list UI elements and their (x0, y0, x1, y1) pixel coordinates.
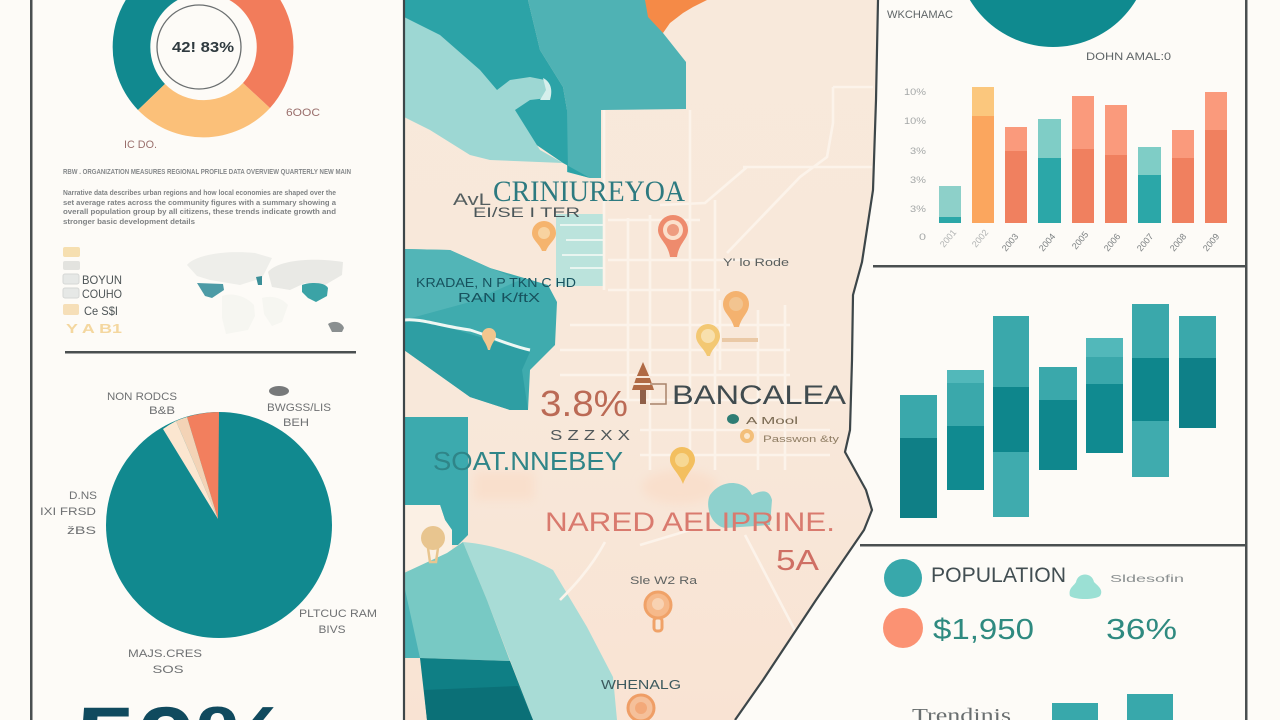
teal bottom: dark (420, 658, 533, 720)
stat: amount: $1,950 (933, 614, 1034, 646)
pie label: bottom: MAJS.CRES (128, 648, 202, 660)
icon: pin orange south (645, 592, 671, 631)
text block: paragraph: stronger basic development details (63, 219, 195, 226)
teal west (404, 249, 557, 410)
map label: road: Y' lo Rode (723, 257, 789, 269)
panel: right column (860, 0, 1248, 720)
map label: south west: SOAT.NNEBEY (433, 446, 623, 476)
icon: pin coral north (658, 215, 688, 257)
text block: heading line: RBW . ORGANIZATION MEASURES REGIONAL PROFILE DATA OVERVIEW QUARTERLY NEW MAIN (63, 169, 351, 176)
teal north: dark (404, 0, 590, 178)
panel divider: lower (860, 544, 1246, 546)
map label: west (416, 275, 576, 305)
pie label: left: D.NS (69, 490, 97, 502)
teal north: light (404, 17, 563, 163)
pie label: bottom: SOS (152, 664, 184, 676)
icon: tower landmark (632, 362, 666, 404)
right column border (1245, 0, 1248, 720)
pie chart (106, 412, 332, 638)
x axis labels: 2002 (970, 228, 990, 249)
map label: 5A: 5A (776, 545, 820, 577)
teal bottom: light (463, 542, 617, 720)
pie label: top right: BEH (283, 417, 309, 429)
pie label: top left: NON RODCS (107, 391, 177, 403)
icon: pin bottom (628, 695, 654, 720)
map label: bottom: WHENALG (601, 677, 681, 692)
stat: percent: 36% (1106, 614, 1177, 646)
icon: coral dot (883, 608, 923, 648)
donut chart (113, 0, 293, 137)
pie label: top right (267, 386, 331, 429)
map label: centre: BANCALEA (672, 380, 846, 410)
icon: pin yellow centre (696, 324, 720, 356)
teal south-west block (404, 417, 468, 545)
population heading: POPULATION (931, 564, 1066, 587)
legend: Ce S$I (84, 304, 118, 318)
pie label: left: žBS (67, 525, 96, 537)
x axis labels: 2004 (1037, 232, 1057, 253)
legend (63, 247, 122, 336)
mini bar 2 (1127, 694, 1173, 720)
icon: pin yellow south (670, 447, 695, 484)
small label: Sldesofin (1110, 574, 1184, 585)
map label: south small: Sle W2 Ra (630, 575, 698, 587)
panel: left column border (30, 0, 32, 720)
text block: paragraph (63, 190, 336, 226)
pie label: bottom (128, 648, 202, 676)
y axis labels (904, 87, 926, 242)
map label: north prefix: AvL (453, 190, 491, 209)
top circle (956, 0, 1150, 47)
y axis labels: 10% (904, 87, 926, 97)
donut chart: 42! 83% (172, 39, 234, 56)
soft peach patches (476, 472, 714, 502)
roads (560, 87, 873, 640)
legend: BOYUN (82, 273, 122, 287)
map label: south red: NARED AELIPRINE. (545, 507, 835, 537)
map stat: 3.8% (540, 383, 628, 424)
icon: small teal marker (727, 414, 739, 424)
icon: pin orange east (723, 291, 749, 327)
pie label: top right: BWGSS/LIS (267, 402, 331, 414)
world map (187, 252, 344, 334)
light teal patch with lines (556, 214, 605, 286)
stats: population (883, 559, 1184, 720)
label: top left: WKCHAMAC (887, 9, 953, 21)
y axis labels: 0 (919, 232, 926, 242)
icon: teal dot (884, 559, 922, 597)
donut label: right: 6OOC (286, 107, 320, 119)
legend: Y A B1 (66, 321, 122, 336)
panel: central map (404, 0, 884, 720)
x axis labels: 2003 (1000, 232, 1020, 253)
y axis labels: 3% (910, 175, 926, 185)
pie label: left (40, 490, 97, 537)
pie label: top left: B&B (149, 405, 175, 417)
icon: pin road bar (722, 338, 758, 342)
text block: paragraph: overall population group by all citizens, these trends indicate growth and (63, 209, 336, 216)
pie label: bottom right: BIVS (318, 624, 346, 636)
map stat sub: S Z Z X X (550, 427, 630, 444)
x axis labels (938, 228, 1221, 253)
x axis labels: 2005 (1070, 230, 1090, 251)
icon: pin small east (740, 429, 754, 443)
x axis labels: 2006 (1102, 232, 1122, 253)
teal north: medium (528, 0, 686, 178)
pie label: top left (107, 391, 177, 417)
x axis labels: 2007 (1135, 232, 1155, 253)
map label: centre small 2: Passwon &ty (763, 434, 840, 444)
map label: centre small: A Mool (746, 416, 798, 427)
text block: paragraph: set average rates across the community figures with a summary showing a (63, 200, 336, 207)
icon: pin orange north (532, 221, 556, 251)
map outline (404, 0, 878, 720)
y axis labels: 3% (910, 146, 926, 156)
text block: paragraph: Narrative data describes urban regions and how local economies are shaped over the (63, 190, 336, 197)
y axis labels: 10% (904, 116, 926, 126)
bar chart: colored (904, 87, 1227, 253)
y axis labels: 3% (910, 204, 926, 214)
x axis labels: 2008 (1168, 232, 1188, 253)
panel: left column charts (40, 0, 377, 720)
divider rule (65, 351, 356, 354)
pie label: bottom right (299, 608, 377, 636)
donut label: bottom: IC DO. (124, 139, 157, 151)
map label: north sub: EI/SE I TER (473, 204, 580, 220)
orange region (645, 0, 707, 33)
teal bottom: medium (404, 542, 510, 661)
label: top right: DOHN AMAL:0 (1086, 51, 1171, 63)
mini bars (1052, 703, 1098, 720)
map label: west: RAN K/ftX (458, 290, 540, 305)
light teal lake (708, 483, 772, 528)
pie label: left: IXI FRSD (40, 506, 96, 518)
map title: north: CRINIUREYOA (493, 175, 685, 208)
x axis labels: 2009 (1201, 232, 1221, 253)
pie label: bottom right: PLTCUC RAM (299, 608, 377, 620)
x axis labels: 2001 (938, 228, 958, 249)
map regions (404, 0, 884, 720)
map label: west: KRADAE, N P TKN C HD (416, 275, 576, 290)
icon: pin teal west (482, 328, 496, 350)
legend: COUHO (82, 287, 122, 301)
bar chart: teal stacked (900, 304, 1216, 518)
icon: cloud (1070, 574, 1101, 599)
icon: pin beige west (421, 526, 445, 562)
panel divider: upper (873, 265, 1246, 268)
